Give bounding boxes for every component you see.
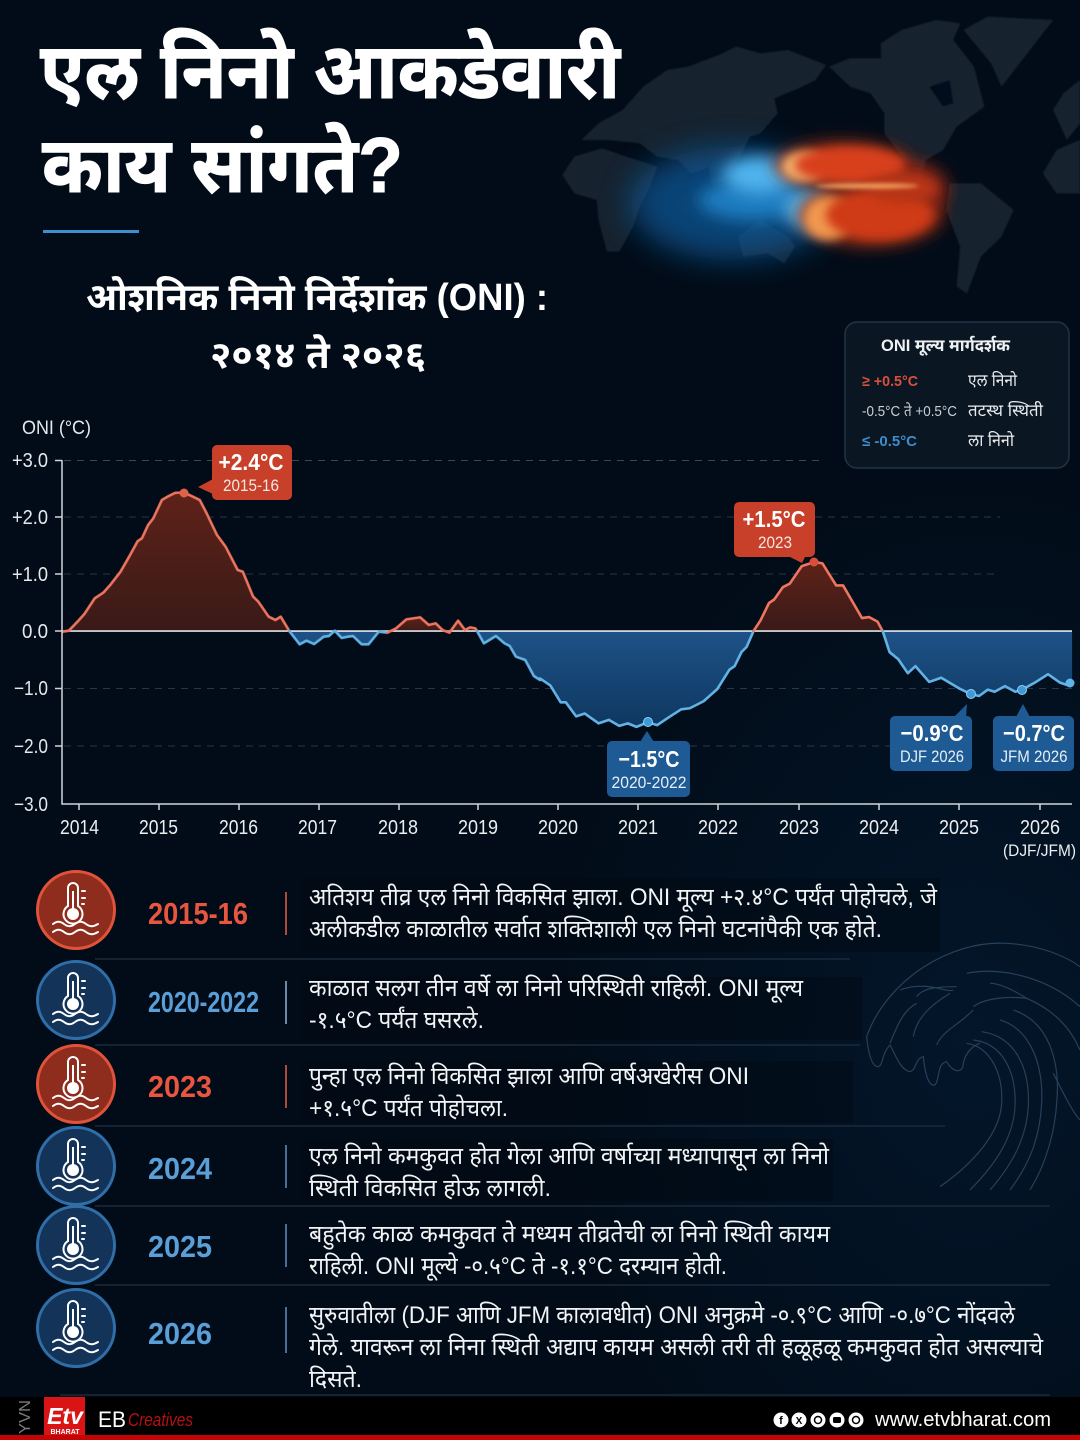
callout: +2.4°C 2015-16 <box>198 445 292 500</box>
callout: -1.5°C 2020-2022 <box>607 731 690 797</box>
row: 2024: 2024 <box>148 1151 213 1186</box>
title: एल निनो आकडेवारी <box>40 27 622 115</box>
row: 2023: 2023 <box>148 1069 212 1104</box>
row: 2024 <box>38 1128 830 1204</box>
zero line <box>62 630 1072 632</box>
row: 2025: बहुतेक काळ कमकुवत ते मध्यम तीव्रतेची ला निनो स्थिती कायम <box>309 1220 831 1250</box>
callout: +1.5°C 2023 <box>734 502 815 563</box>
row: 2020-2022: काळात सलग तीन वर्षे ला निनो परिस्थिती राहिली. ONI मूल्य <box>309 974 804 1003</box>
legend panel: ONI value guide: ला निनो <box>968 430 1015 450</box>
legend panel: ONI value guide: ONI मूल्य मार्गदर्शक <box>881 335 1011 357</box>
subtitle: ओशनिक निनो निर्देशांक (ONI) : <box>86 275 548 319</box>
x axis labels: 2019 <box>458 817 498 839</box>
website url: www.etvbharat.com <box>874 1409 1051 1431</box>
x axis labels: 2015 <box>139 817 178 839</box>
x axis labels: 2018 <box>378 817 418 839</box>
legend panel: ONI value guide: तटस्थ स्थिती <box>968 400 1044 420</box>
callout: -0.7°C JFM 2026 <box>993 704 1074 771</box>
row: 2026 <box>38 1290 1044 1393</box>
row: 2023: पुन्हा एल निनो विकसित झाला आणि वर्षअखेरीस ONI <box>309 1062 749 1091</box>
subtitle: २०१४ ते २०२६ <box>210 333 426 377</box>
title: काय सांगते? <box>42 121 403 209</box>
social icons: f <box>779 1415 783 1427</box>
axes <box>55 460 1072 810</box>
row: 2015-16 <box>38 872 938 948</box>
x axis labels <box>60 817 1076 860</box>
row: 2025 <box>38 1206 831 1284</box>
row: 2026: सुरुवातीला (DJF आणि JFM कालावधीत) ONI अनुक्रमे -०.९°C आणि -०.७°C नोंदवले <box>309 1301 1016 1330</box>
y axis labels: +1.0 <box>12 564 48 586</box>
row: 2024: स्थिती विकसित होऊ लागली. <box>309 1174 551 1202</box>
y axis labels: −1.0 <box>14 678 48 700</box>
panel: timeline rows <box>38 872 1050 1395</box>
y axis labels: −3.0 <box>14 794 48 816</box>
callout: +2.4°C 2015-16: +2.4°C <box>218 449 284 475</box>
row: 2020-2022: -१.५°C पर्यंत घसरले. <box>309 1006 484 1034</box>
row: 2026: 2026 <box>148 1316 212 1351</box>
row: 2025: राहिली. ONI मूल्ये -०.५°C ते -१.१°C दरम्यान होती. <box>309 1252 727 1281</box>
row: 2015-16: अतिशय तीव्र एल निनो विकसित झाला. ONI मूल्य +२.४°C पर्यंत पोहोचले, जे <box>309 883 938 912</box>
world map with El Nino heat pattern <box>562 17 1080 293</box>
YVN vertical credit: YVN <box>17 1400 34 1434</box>
row: 2026: दिसते. <box>309 1365 362 1393</box>
ONI line <box>63 493 540 680</box>
social icons: X <box>796 1416 803 1427</box>
x axis labels: 2024 <box>859 817 899 839</box>
y axis labels: +3.0 <box>12 450 48 472</box>
logo: ETV Bharat: Etv <box>47 1403 84 1429</box>
y axis labels: 0.0 <box>22 621 48 643</box>
x axis labels: 2020 <box>538 817 578 839</box>
legend panel: ONI value guide: ≤ -0.5°C <box>862 433 917 450</box>
row: 2015-16: 2015-16 <box>148 896 248 931</box>
x axis labels: 2025 <box>939 817 979 839</box>
area fills <box>63 493 541 680</box>
title <box>40 27 622 209</box>
legend panel: ONI value guide: ≥ +0.5°C <box>862 373 918 390</box>
logo: ETV Bharat: BHARAT <box>50 1429 80 1436</box>
callout: +1.5°C 2023: +1.5°C <box>742 506 806 532</box>
callout: -0.9°C DJF 2026 <box>890 704 972 771</box>
peak and trough markers <box>180 488 1074 726</box>
callout: +2.4°C 2015-16: 2015-16 <box>223 476 279 495</box>
y axis labels: −2.0 <box>14 736 48 758</box>
row: 2023: +१.५°C पर्यंत पोहोचला. <box>309 1094 508 1122</box>
row: 2020-2022: 2020-2022 <box>148 987 259 1019</box>
logo: ETV Bharat <box>44 1397 85 1436</box>
row: 2023 <box>38 1046 749 1122</box>
row: 2025: 2025 <box>148 1229 212 1264</box>
callout: +1.5°C 2023: 2023 <box>758 533 792 552</box>
text background strips <box>300 878 940 1201</box>
legend panel: ONI value guide: -0.5°C ते +0.5°C <box>862 402 957 420</box>
logo: EB Creatives <box>98 1407 193 1432</box>
y axis labels <box>12 418 91 816</box>
callout: -0.7°C JFM 2026: JFM 2026 <box>1000 747 1068 766</box>
callout: -0.9°C DJF 2026: −0.9°C <box>900 720 964 746</box>
x axis labels: 2021 <box>618 817 658 839</box>
row: 2020-2022 <box>38 962 804 1038</box>
x axis labels: 2016 <box>219 817 258 839</box>
footer bar <box>0 1397 1080 1440</box>
title underline <box>43 230 139 233</box>
legend panel: ONI value guide: एल निनो <box>968 370 1018 390</box>
callout: -0.9°C DJF 2026: DJF 2026 <box>900 747 964 766</box>
x axis labels: 2022 <box>698 817 738 839</box>
chart: ONI line chart 2014-2026 <box>12 418 1076 860</box>
row: 2015-16: अलीकडील काळातील सर्वात शक्तिशाली एल निनो घटनांपैकी एक होते. <box>309 915 882 943</box>
callout: -0.7°C JFM 2026: −0.7°C <box>1003 720 1065 746</box>
x axis labels: 2023 <box>779 817 819 839</box>
callout: -1.5°C 2020-2022: −1.5°C <box>618 746 680 772</box>
callout: -1.5°C 2020-2022: 2020-2022 <box>612 773 686 792</box>
y axis labels: ONI (°C) <box>22 418 91 439</box>
y axis labels: +2.0 <box>12 507 48 529</box>
logo: EB Creatives: Creatives <box>128 1410 193 1430</box>
subtitle <box>86 275 548 377</box>
logo: EB Creatives: EB <box>98 1407 126 1432</box>
row: 2024: एल निनो कमकुवत होत गेला आणि वर्षाच्या मध्यापासून ला निनो <box>309 1142 830 1171</box>
legend panel: ONI value guide <box>845 322 1069 468</box>
x axis labels: 2014 <box>60 817 99 839</box>
decorative wave illustration <box>867 943 1080 1190</box>
x axis labels: 2017 <box>298 817 337 839</box>
social icons <box>774 1412 864 1428</box>
x axis labels: 2026 <box>1020 817 1060 839</box>
row separators <box>60 959 1050 1395</box>
row: 2026: गेले. यावरून ला निना स्थिती अद्याप कायम असली तरी ती हळूहळू कमकुवत होत असल्याचे <box>309 1333 1044 1362</box>
